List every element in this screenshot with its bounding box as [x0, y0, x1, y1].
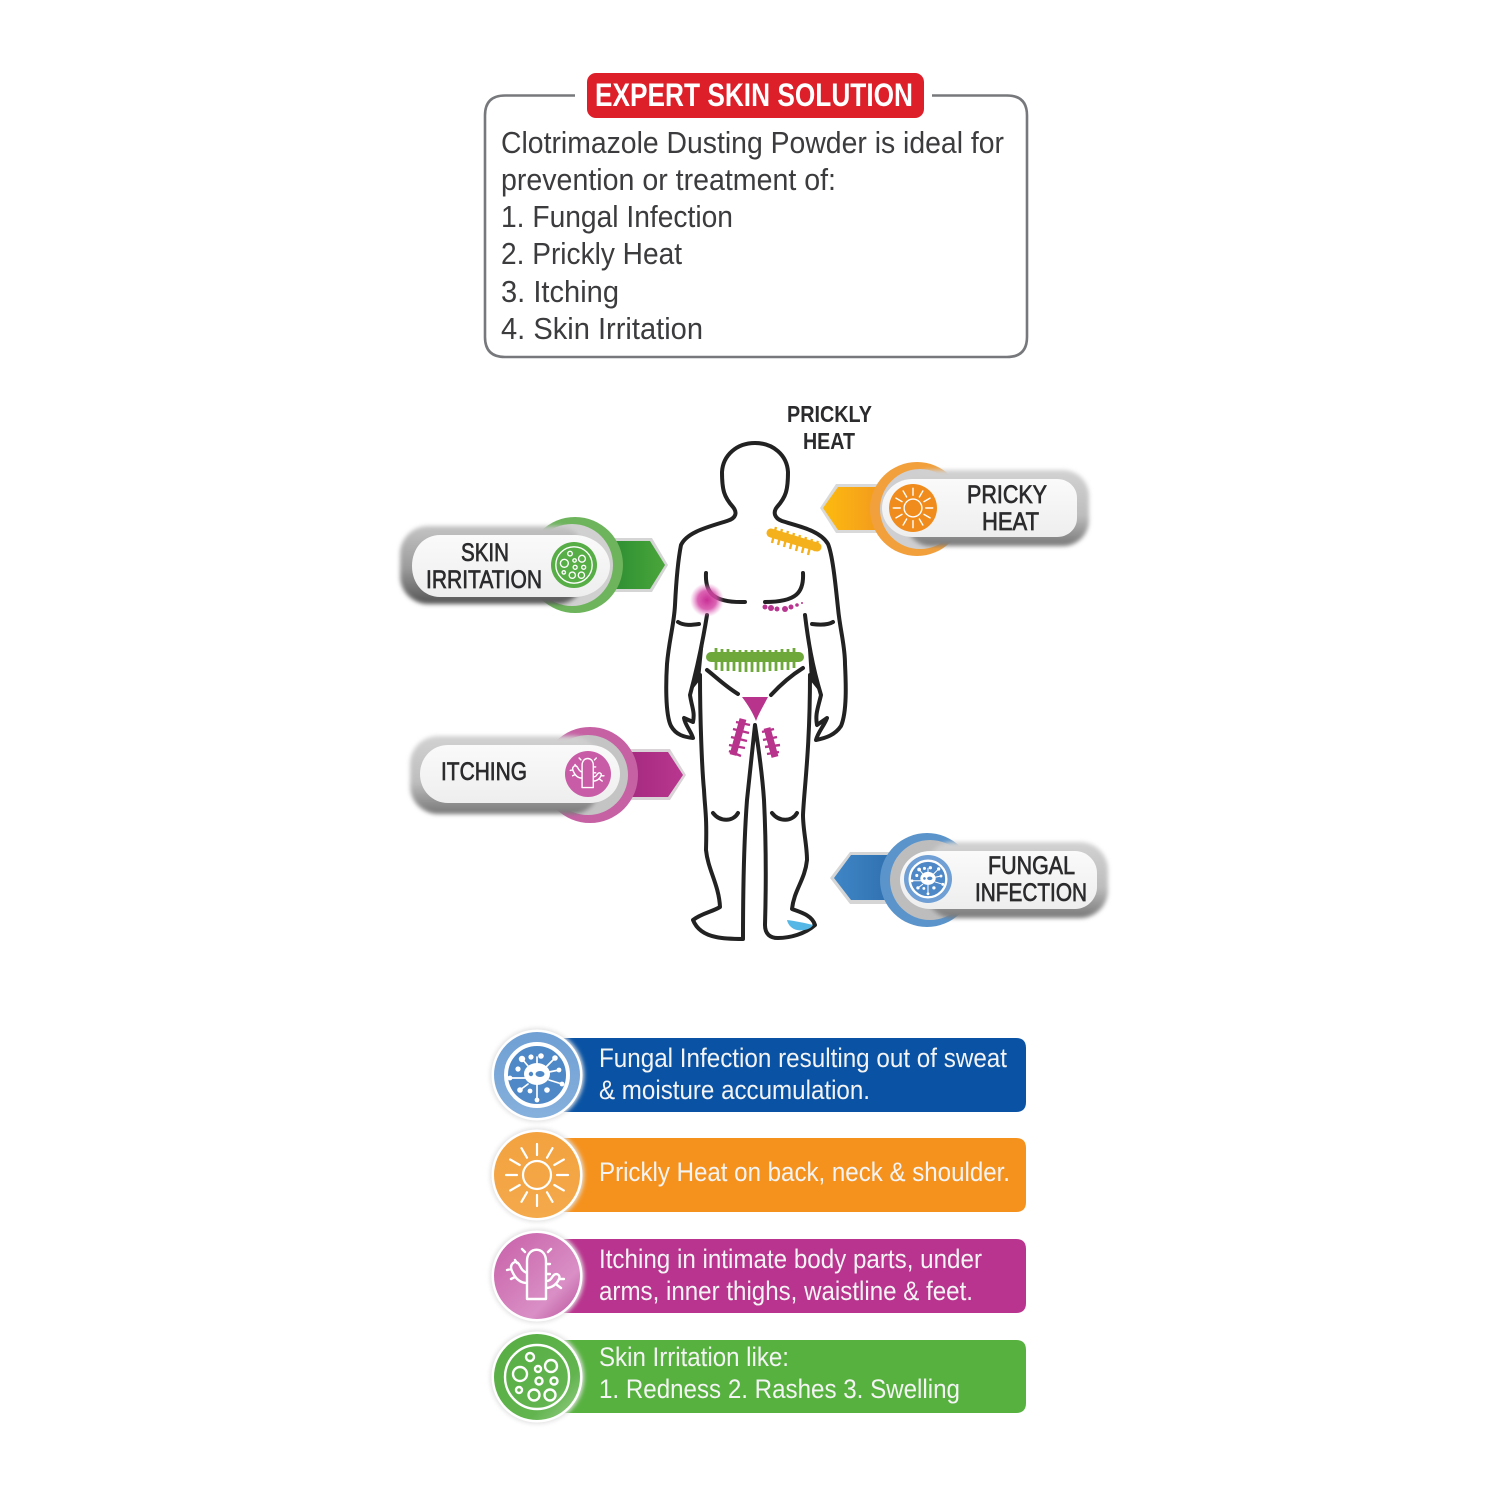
icon: sun — [490, 1128, 584, 1222]
icon: skin cells — [490, 1330, 584, 1424]
icon: skin cells — [551, 542, 597, 588]
icon: virus — [490, 1028, 584, 1122]
text — [599, 1043, 1007, 1105]
info bar: prickly heat — [490, 1128, 1026, 1222]
thigh rash right — [762, 728, 780, 757]
info bar: skin irritation — [490, 1330, 1026, 1424]
heading badge — [587, 73, 924, 118]
ring — [542, 727, 638, 823]
info bar: itching — [490, 1229, 1026, 1323]
pill shadow — [410, 736, 600, 814]
label: prickly heat above the body: PRICKLY — [787, 401, 872, 427]
arrow — [820, 484, 880, 533]
upper body and arms outline — [666, 443, 846, 740]
label text — [975, 852, 1087, 907]
label text — [967, 481, 1047, 536]
pill — [420, 745, 620, 803]
label text: SKIN — [461, 539, 509, 567]
torso and legs outline — [693, 675, 815, 939]
text: 1. Redness 2. Rashes 3. Swelling — [599, 1374, 960, 1404]
label text: ITCHING — [441, 758, 527, 786]
icon: cactus — [565, 751, 611, 797]
callout: skin irritation — [400, 517, 668, 613]
arrow — [830, 852, 895, 904]
armpit wedges — [692, 618, 818, 690]
label text: PRICKY — [967, 481, 1047, 509]
bar — [536, 1239, 1026, 1313]
panel outline — [485, 96, 1027, 357]
pill — [900, 851, 1097, 909]
ring — [880, 833, 974, 927]
intro and list text: 4. Skin Irritation — [501, 311, 703, 346]
info bar: fungal infection — [490, 1028, 1026, 1122]
heading badge: EXPERT SKIN SOLUTION — [595, 77, 913, 113]
text: Itching in intimate body parts, under — [599, 1244, 982, 1274]
text: Fungal Infection resulting out of sweat — [599, 1043, 1007, 1073]
intro and list text: 2. Prickly Heat — [501, 236, 682, 271]
label text: FUNGAL — [988, 852, 1075, 880]
text: arms, inner thighs, waistline & feet. — [599, 1276, 973, 1306]
bar — [536, 1340, 1026, 1413]
intro and list text: 3. Itching — [501, 274, 619, 309]
intro and list text — [501, 125, 1004, 346]
pill shadow — [905, 470, 1089, 546]
text — [599, 1244, 982, 1306]
text: Skin Irritation like: — [599, 1342, 789, 1372]
arrow — [615, 538, 668, 592]
callout: fungal infection — [830, 833, 1108, 927]
chest rash dots — [762, 602, 803, 612]
icon: cactus — [490, 1229, 584, 1323]
text: & moisture accumulation. — [599, 1075, 870, 1105]
text: Prickly Heat on back, neck & shoulder. — [599, 1157, 1010, 1187]
pill — [882, 479, 1077, 537]
text — [599, 1342, 960, 1404]
callout: pricky heat — [820, 462, 1089, 556]
panel: expert skin solution — [485, 73, 1027, 357]
chest and joint creases — [678, 573, 833, 820]
pill — [412, 535, 610, 597]
thigh rash left — [729, 719, 750, 756]
ring — [527, 517, 623, 613]
shoulder rash — [771, 527, 818, 555]
waist rash — [711, 648, 799, 672]
pill shadow — [400, 526, 585, 604]
bar — [536, 1138, 1026, 1212]
armpit glow — [690, 583, 724, 617]
label text: INFECTION — [975, 879, 1087, 907]
label: prickly heat above the body: HEAT — [803, 428, 855, 454]
pill shadow — [925, 842, 1108, 918]
foot patch — [787, 920, 813, 930]
intro and list text: Clotrimazole Dusting Powder is ideal for — [501, 125, 1004, 160]
intro and list text: prevention or treatment of: — [501, 162, 836, 197]
bar — [536, 1038, 1026, 1112]
ring — [870, 462, 964, 556]
icon: virus — [904, 855, 952, 903]
arrow — [630, 749, 686, 800]
body figure — [666, 443, 846, 939]
label text: HEAT — [982, 508, 1039, 536]
callout: itching — [410, 727, 686, 823]
label: prickly heat above the body — [787, 401, 872, 454]
label text: IRRITATION — [426, 566, 542, 594]
intro and list text: 1. Fungal Infection — [501, 199, 733, 234]
icon: sun — [889, 484, 937, 532]
label text — [426, 539, 542, 594]
groin patch — [742, 697, 768, 721]
